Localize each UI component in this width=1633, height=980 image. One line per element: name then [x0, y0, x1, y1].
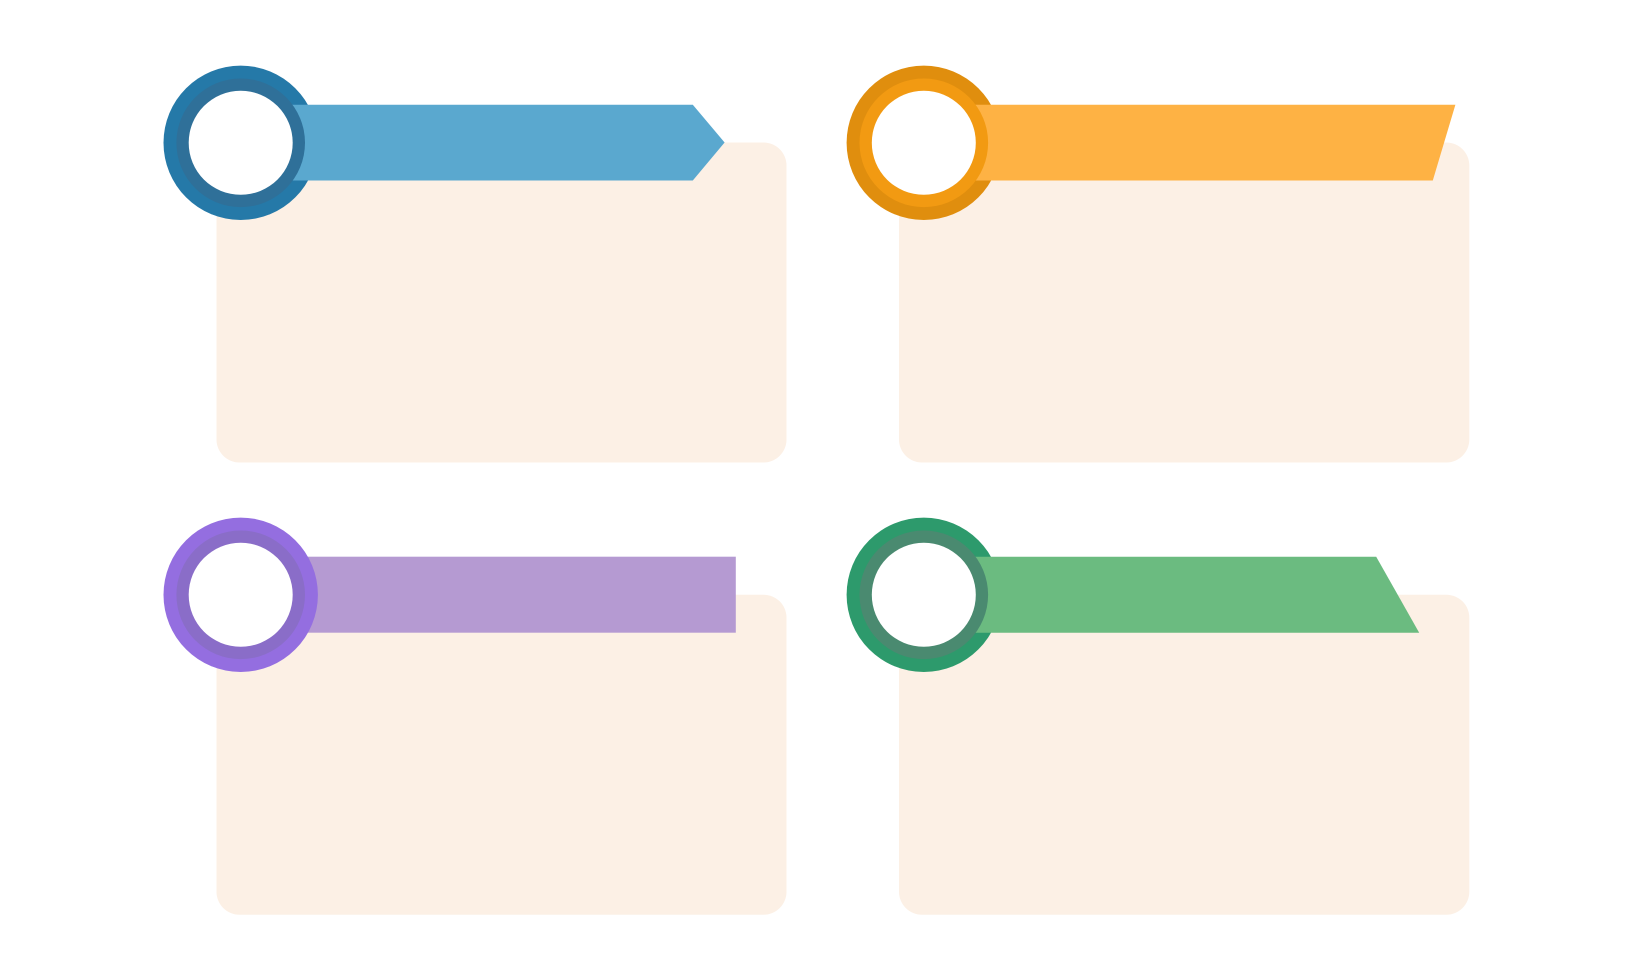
icon placeholder: white circle	[872, 91, 976, 195]
icon badge: purple inner ring	[176, 530, 305, 659]
card: top right	[899, 142, 1469, 462]
icon badge: green inner ring	[860, 530, 988, 659]
icon badge: green ring base	[847, 518, 1001, 672]
icon badge: orange ring base	[847, 66, 1001, 220]
icon placeholder: white circle	[189, 91, 293, 195]
panel: top left	[164, 66, 786, 462]
ribbon: purple rectangle	[300, 557, 736, 633]
panel: bottom left	[164, 518, 786, 915]
card: bottom left	[216, 595, 786, 915]
icon badge: purple ring base	[164, 518, 318, 672]
panel: top right	[847, 66, 1469, 462]
icon badge: orange inner ring	[860, 78, 988, 207]
icon placeholder: white circle	[872, 543, 976, 647]
panel: bottom right	[847, 518, 1469, 915]
ribbon: blue arrow	[292, 105, 725, 180]
icon badge: blue inner ring	[176, 78, 305, 207]
card: bottom right	[899, 595, 1469, 915]
icon badge: blue ring base	[164, 66, 318, 220]
ribbon: green slanted	[975, 557, 1419, 633]
card: top left	[216, 142, 786, 462]
icon placeholder: white circle	[189, 543, 293, 647]
ribbon: orange slanted	[975, 105, 1455, 180]
